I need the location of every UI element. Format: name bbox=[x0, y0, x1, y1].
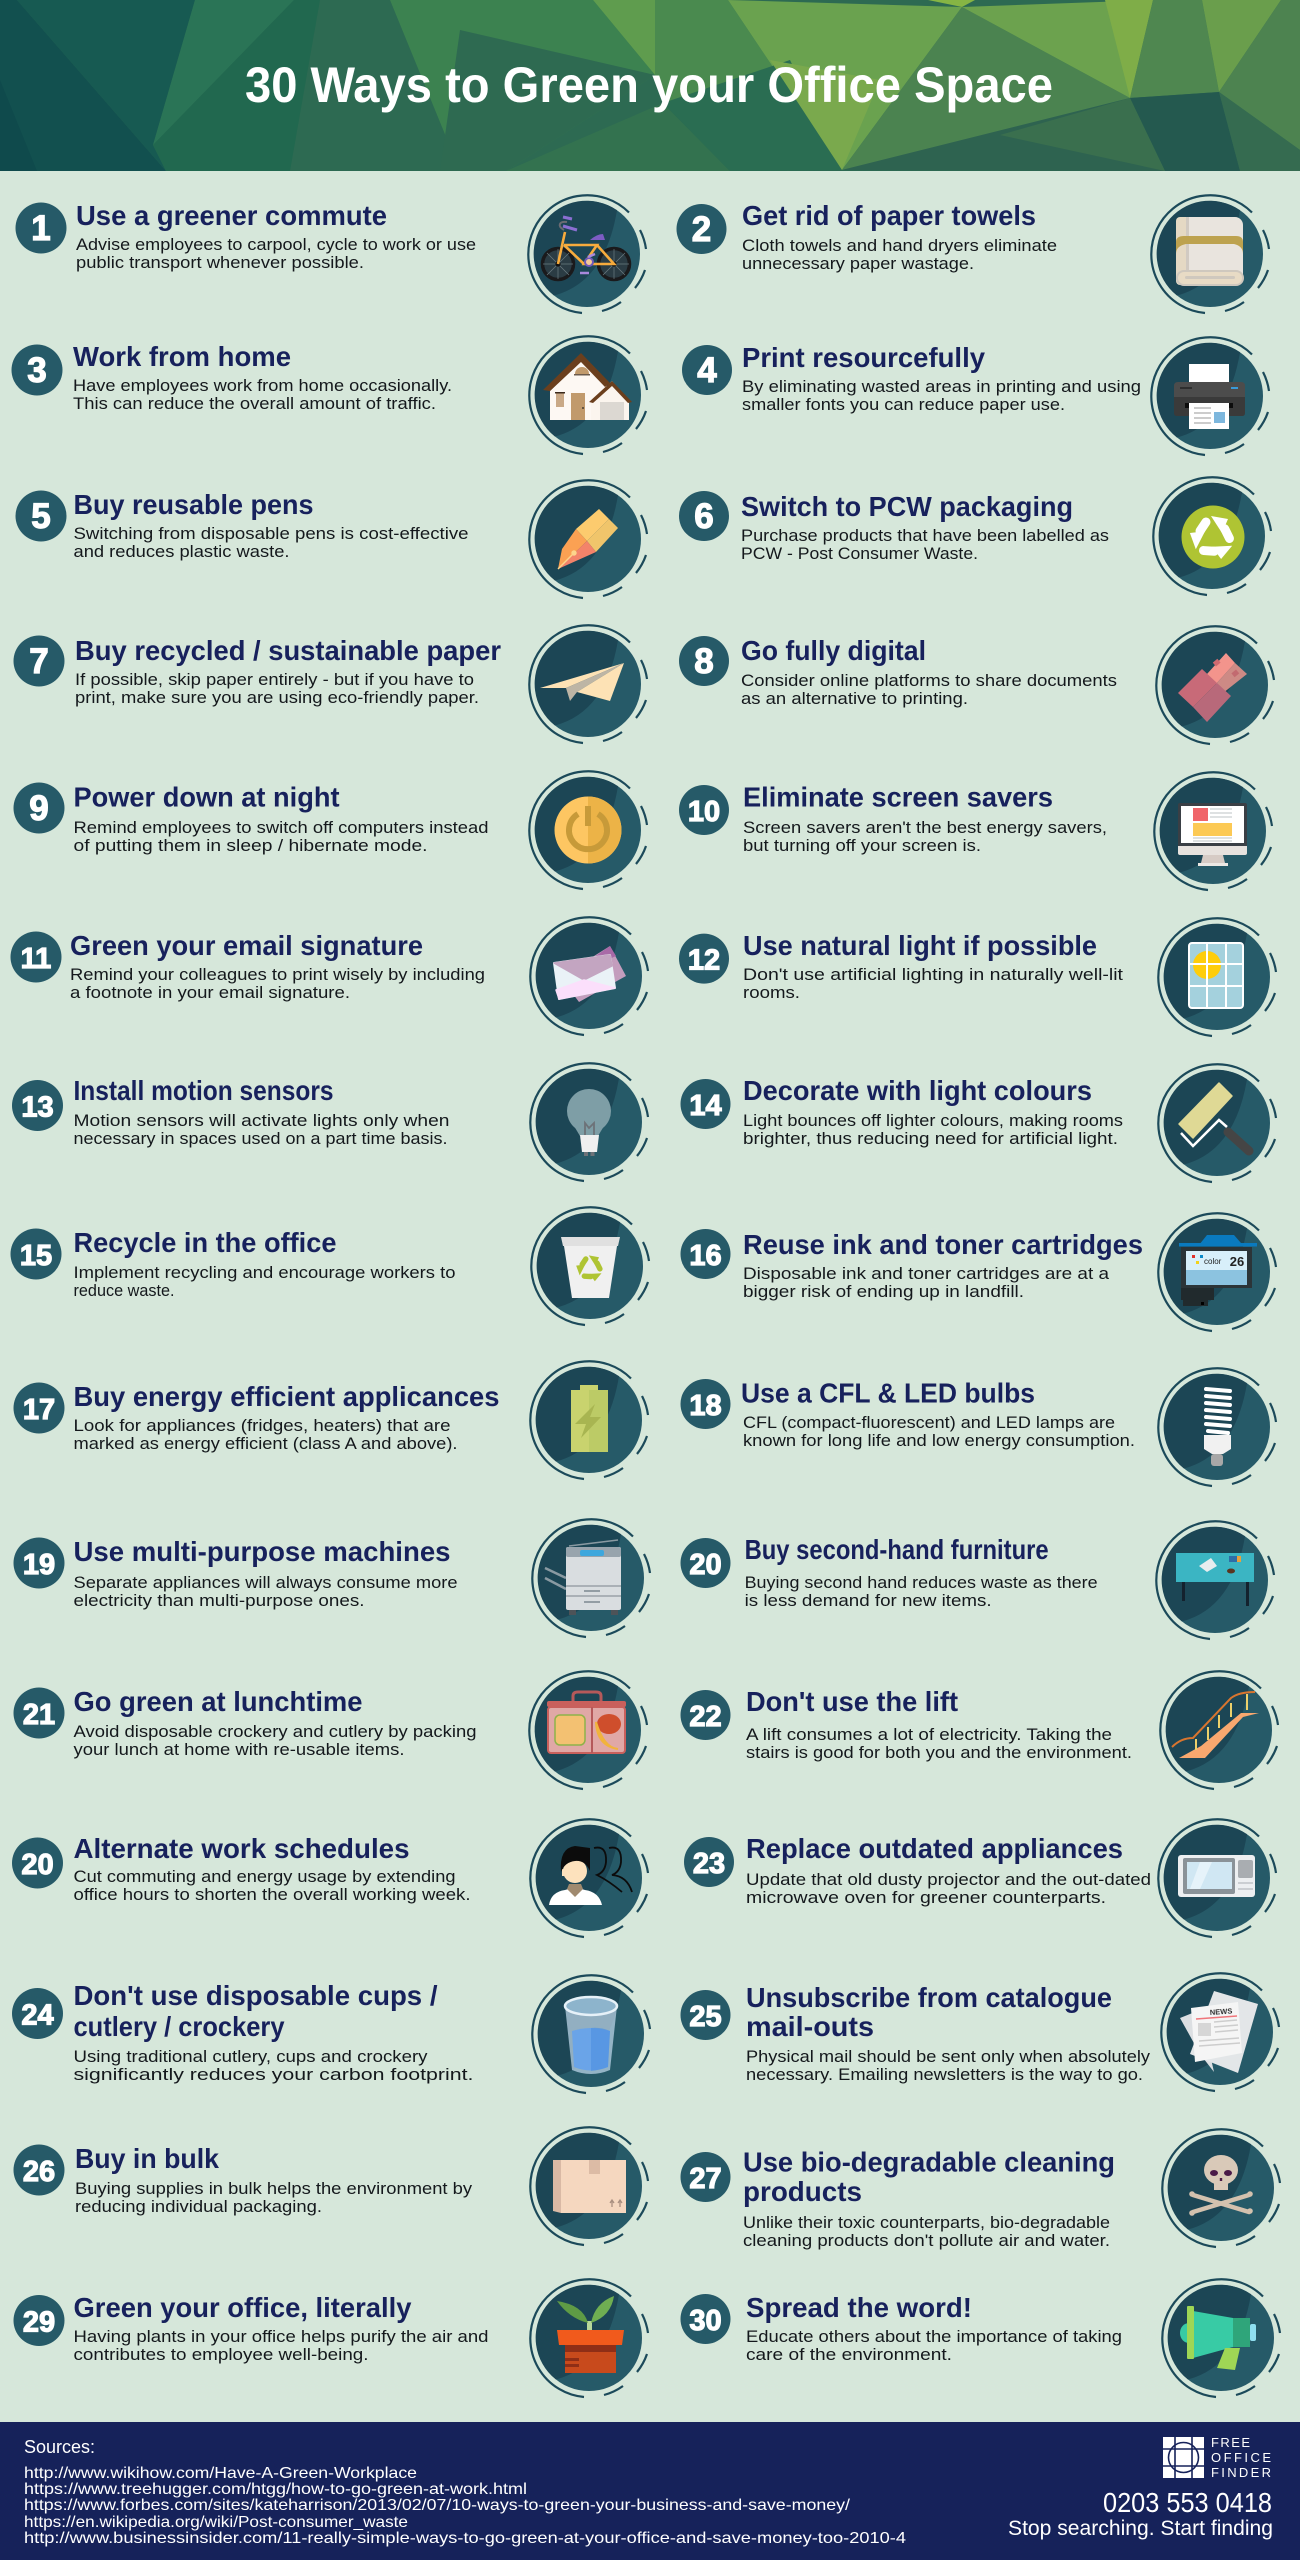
icon: battery bbox=[530, 1361, 648, 1479]
icon: microwave bbox=[1158, 1819, 1276, 1937]
sources list: https://en.wikipedia.org/wiki/Post-consumer_waste bbox=[24, 2514, 408, 2531]
sources list: http://www.wikihow.com/Have-A-Green-Workplace bbox=[24, 2465, 417, 2482]
heading 25: mail-outs bbox=[746, 2011, 874, 2042]
icon: paper plane bbox=[529, 625, 647, 743]
icon: ink cartridge: color bbox=[1204, 1257, 1222, 1266]
description 23: Update that old dusty projector and the out-dated bbox=[746, 1870, 1151, 1889]
description 10: but turning off your screen is. bbox=[743, 836, 981, 855]
heading 2: Get rid of paper towels bbox=[742, 200, 1036, 231]
description 7: print, make sure you are using eco-friendly paper. bbox=[75, 688, 479, 707]
description 21: Avoid disposable crockery and cutlery by packing bbox=[74, 1722, 476, 1741]
description alternate work schedules: office hours to shorten the overall working week. bbox=[74, 1885, 470, 1904]
number badge 27 bbox=[680, 2152, 730, 2202]
description 21: your lunch at home with re-usable items. bbox=[74, 1740, 405, 1759]
description 6: PCW - Post Consumer Waste. bbox=[741, 544, 978, 563]
description 15 bbox=[74, 1263, 455, 1300]
item 5: Buy reusable pens bbox=[16, 480, 647, 598]
icon: cfl bulb bbox=[1158, 1368, 1276, 1486]
icon: paint roller bbox=[1158, 1064, 1276, 1182]
number badge 24: 24 bbox=[21, 2000, 54, 2032]
description 10: Screen savers aren't the best energy savers, bbox=[743, 818, 1107, 837]
description 2: unnecessary paper wastage. bbox=[742, 254, 974, 273]
item 24: Replace outdated appliances bbox=[684, 1819, 1276, 1937]
item 15: Recycle in the office bbox=[10, 1207, 649, 1325]
item 18: Use a CFL & LED bulbs bbox=[680, 1368, 1276, 1486]
number badge 15 bbox=[10, 1228, 62, 1280]
description 13: Motion sensors will activate lights only when bbox=[74, 1111, 450, 1130]
icon: recycle symbol bbox=[1153, 477, 1271, 595]
description 14: Light bounces off lighter colours, making rooms bbox=[743, 1111, 1123, 1130]
description 18: known for long life and low energy consumption. bbox=[743, 1431, 1135, 1450]
number badge 2 bbox=[676, 204, 726, 254]
number badge 19: 19 bbox=[23, 1549, 55, 1581]
item 6: Switch to PCW packaging bbox=[679, 477, 1271, 595]
heading 10: Eliminate screen savers bbox=[743, 782, 1053, 812]
icon: ink cartridge: 26 bbox=[1230, 1254, 1244, 1269]
description 20: Buying second hand reduces waste as there bbox=[745, 1573, 1098, 1592]
sources list: http://www.businessinsider.com/11-really-simple-ways-to-go-green-at-your-office-and-save-money-too-2010-4 bbox=[24, 2530, 906, 2547]
number badge 18: 18 bbox=[689, 1390, 722, 1422]
footer band bbox=[0, 2422, 1300, 2560]
heading 27: Use bio-degradable cleaning bbox=[743, 2147, 1115, 2178]
heading 24: cutlery / crockery bbox=[74, 2011, 285, 2042]
phone number: 0203 553 0418 bbox=[1103, 2487, 1272, 2518]
description 9 bbox=[74, 818, 488, 855]
number badge 13: 13 bbox=[21, 1092, 54, 1124]
number badge 7: 7 bbox=[29, 642, 49, 681]
description 7: If possible, skip paper entirely - but if you have to bbox=[75, 670, 474, 689]
icon: skull and crossbones bbox=[1162, 2129, 1280, 2247]
description 27: cleaning products don't pollute air and water. bbox=[743, 2231, 1110, 2250]
item 28: Use bio-degradable cleaning products bbox=[680, 2129, 1280, 2250]
description 26: Buying supplies in bulk helps the environment by bbox=[75, 2179, 473, 2198]
icon: lunch box bbox=[529, 1671, 647, 1789]
heading 15: Recycle in the office bbox=[74, 1227, 336, 1258]
icon: office workers bbox=[530, 1819, 648, 1937]
item 20: Buy second-hand furniture bbox=[680, 1521, 1274, 1639]
logo wordmark bbox=[1211, 2435, 1271, 2480]
number badge 8: 8 bbox=[694, 642, 714, 681]
heading 24 bbox=[74, 1980, 438, 2042]
number badge 6 bbox=[679, 491, 729, 541]
logo wordmark: OFFICE bbox=[1211, 2450, 1271, 2465]
number badge 17: 17 bbox=[23, 1394, 55, 1426]
item 11: Green your email signature bbox=[10, 917, 648, 1035]
description 4 bbox=[742, 377, 1141, 414]
heading 19: Use multi-purpose machines bbox=[74, 1536, 450, 1567]
icon: printer bbox=[1151, 337, 1269, 455]
item 21: Go green at lunchtime bbox=[14, 1671, 647, 1789]
number badge 22: 22 bbox=[689, 1701, 722, 1733]
number badge 21 bbox=[14, 1688, 64, 1738]
description 17 bbox=[74, 1416, 458, 1453]
heading 8: Go fully digital bbox=[741, 635, 926, 666]
description 14: brighter, thus reducing need for artificial light. bbox=[743, 1129, 1118, 1148]
icon: glass of water bbox=[532, 1975, 650, 2093]
description 25: Physical mail should be sent only when absolutely bbox=[746, 2047, 1151, 2066]
heading 27 bbox=[743, 2147, 1115, 2207]
description 12 bbox=[743, 965, 1123, 1002]
number badge 25 bbox=[680, 1990, 730, 2040]
number badge 1: 1 bbox=[31, 209, 51, 248]
header banner bbox=[0, 0, 1300, 171]
number badge 20 (second): 20 bbox=[21, 1849, 54, 1881]
description 1 bbox=[76, 235, 476, 272]
number badge 26 bbox=[14, 2144, 64, 2196]
number badge 29: 29 bbox=[23, 2306, 55, 2338]
item 27: Buy in bulk bbox=[14, 2127, 648, 2245]
description 11: a footnote in your email signature. bbox=[70, 983, 350, 1002]
item 7: Buy recycled / sustainable paper bbox=[14, 625, 647, 743]
description 13: necessary in spaces used on a part time basis. bbox=[74, 1129, 447, 1148]
description 16 bbox=[743, 1264, 1110, 1301]
item 10: Eliminate screen savers bbox=[679, 772, 1272, 890]
description 9: Remind employees to switch off computers instead bbox=[74, 818, 488, 837]
description 2 bbox=[742, 236, 1057, 273]
number badge 4 bbox=[682, 345, 732, 395]
number badge 20 bbox=[680, 1538, 730, 1588]
description 6: Purchase products that have been labelled as bbox=[741, 526, 1109, 545]
icon: ink cartridge bbox=[1158, 1213, 1276, 1331]
number badge 26: 26 bbox=[23, 2156, 55, 2188]
number badge 21: 21 bbox=[23, 1699, 55, 1731]
description 29 bbox=[74, 2327, 488, 2364]
number badge 12 bbox=[679, 934, 729, 984]
heading 25 bbox=[746, 1982, 1112, 2042]
number badge 7 bbox=[14, 636, 64, 686]
icon: recycling bin bbox=[531, 1207, 649, 1325]
number badge 6: 6 bbox=[694, 497, 714, 536]
item 9: Power down at night bbox=[14, 771, 647, 889]
description 3: This can reduce the overall amount of traffic. bbox=[73, 394, 436, 413]
description 27 bbox=[743, 2213, 1110, 2250]
description 23 bbox=[746, 1870, 1151, 1907]
heading 27: products bbox=[743, 2176, 862, 2207]
number badge 1 bbox=[16, 202, 66, 254]
heading 11: Green your email signature bbox=[70, 930, 423, 961]
number badge 30 bbox=[680, 2294, 730, 2344]
number badge 4: 4 bbox=[697, 351, 717, 390]
icon: usb stick bbox=[1156, 626, 1274, 744]
item 2: Get rid of paper towels bbox=[676, 195, 1269, 313]
description 6 bbox=[741, 526, 1109, 563]
sources list bbox=[24, 2465, 906, 2547]
heading 1: Use a greener commute bbox=[76, 200, 387, 231]
number badge 9 bbox=[14, 782, 64, 834]
heading 5: Buy reusable pens bbox=[74, 489, 314, 520]
icon: bicycle bbox=[528, 195, 646, 313]
icon: light bulb bbox=[530, 1063, 648, 1181]
number badge 16 bbox=[680, 1229, 730, 1279]
icon: newspapers bbox=[1161, 1973, 1279, 2091]
number badge 25: 25 bbox=[689, 2001, 722, 2033]
number badge 14 bbox=[680, 1079, 730, 1129]
description 15: Implement recycling and encourage workers to bbox=[74, 1263, 455, 1282]
icon: pen bbox=[529, 480, 647, 598]
number badge 16: 16 bbox=[689, 1240, 722, 1272]
icon: house bbox=[529, 336, 647, 454]
number badge 10 bbox=[679, 785, 729, 835]
number badge 11 bbox=[10, 932, 62, 982]
description 7 bbox=[75, 670, 479, 707]
description 2: Cloth towels and hand dryers eliminate bbox=[742, 236, 1057, 255]
item 29: Green your office, literally bbox=[14, 2279, 648, 2397]
item 26: Unsubscribe from catalogue mail-outs bbox=[680, 1973, 1279, 2091]
item 4: Print resourcefully bbox=[682, 337, 1269, 455]
item 16: Reuse ink and toner cartridges bbox=[680, 1213, 1276, 1331]
item 25: Don't use disposable cups / cutlery / crockery bbox=[12, 1975, 650, 2093]
number badge 23 bbox=[684, 1837, 734, 1887]
description 26 bbox=[75, 2179, 473, 2216]
description 21 bbox=[74, 1722, 476, 1759]
item 19: Use multi-purpose machines bbox=[14, 1519, 650, 1637]
heading 25: Unsubscribe from catalogue bbox=[746, 1982, 1112, 2013]
description 9: of putting them in sleep / hibernate mode. bbox=[74, 836, 428, 855]
description 11 bbox=[70, 965, 485, 1002]
description 1: Advise employees to carpool, cycle to work or use bbox=[76, 235, 476, 254]
description 25: necessary. Emailing newsletters is the way to go. bbox=[746, 2065, 1143, 2084]
description 4: smaller fonts you can reduce paper use. bbox=[742, 395, 1065, 414]
icon: cardboard box bbox=[530, 2127, 648, 2245]
heading alternate work schedules: Alternate work schedules bbox=[74, 1833, 410, 1864]
heading 22: Don't use the lift bbox=[746, 1686, 958, 1717]
heading 9: Power down at night bbox=[74, 782, 340, 812]
description alternate work schedules: Cut commuting and energy usage by extending bbox=[74, 1867, 456, 1886]
number badge 20 (second) bbox=[12, 1838, 63, 1888]
number badge 9: 9 bbox=[29, 789, 49, 828]
description 19: electricity than multi-purpose ones. bbox=[74, 1591, 364, 1610]
description 22: stairs is good for both you and the environment. bbox=[746, 1743, 1132, 1762]
description 3: Have employees work from home occasionally. bbox=[73, 376, 452, 395]
description 19 bbox=[74, 1573, 458, 1610]
description 22: A lift consumes a lot of electricity. Taking the bbox=[746, 1725, 1112, 1744]
description 16: Disposable ink and toner cartridges are at a bbox=[743, 1264, 1110, 1283]
heading 3: Work from home bbox=[73, 341, 291, 372]
number badge 3: 3 bbox=[27, 351, 47, 390]
icon: potted plant bbox=[530, 2279, 648, 2397]
description 29: contributes to employee well-being. bbox=[74, 2345, 368, 2364]
description 30: care of the environment. bbox=[746, 2345, 952, 2364]
description 5: and reduces plastic waste. bbox=[74, 542, 290, 561]
description 30: Educate others about the importance of taking bbox=[746, 2327, 1122, 2346]
description 3 bbox=[73, 376, 452, 413]
heading 4: Print resourcefully bbox=[742, 342, 985, 373]
heading 12: Use natural light if possible bbox=[743, 930, 1097, 961]
item 14: Decorate with light colours bbox=[680, 1064, 1276, 1182]
logo mark bbox=[1163, 2437, 1204, 2478]
description 10 bbox=[743, 818, 1107, 855]
number badge 13 bbox=[12, 1080, 63, 1131]
item 1: Use a greener commute bbox=[16, 195, 646, 313]
number badge 10: 10 bbox=[688, 796, 720, 828]
heading 6: Switch to PCW packaging bbox=[741, 491, 1073, 522]
description 12: rooms. bbox=[743, 983, 800, 1002]
description 24 bbox=[74, 2047, 474, 2084]
number badge 8 bbox=[679, 636, 729, 686]
number badge 24 bbox=[12, 1988, 63, 2039]
description 14 bbox=[743, 1111, 1123, 1148]
heading 7: Buy recycled / sustainable paper bbox=[75, 635, 501, 666]
description 17: marked as energy efficient (class A and above). bbox=[74, 1434, 458, 1453]
number badge 5: 5 bbox=[31, 497, 51, 536]
item 12: Use natural light if possible bbox=[679, 918, 1276, 1036]
number badge 12: 12 bbox=[688, 945, 720, 977]
heading 20: Buy second-hand furniture bbox=[745, 1534, 1049, 1565]
description 22 bbox=[746, 1725, 1132, 1762]
heading 23: Replace outdated appliances bbox=[746, 1833, 1123, 1864]
description 12: Don't use artificial lighting in naturally well-lit bbox=[743, 965, 1123, 984]
sources list: https://www.treehugger.com/htgg/how-to-go-green-at-work.html bbox=[24, 2481, 527, 2498]
number badge 18 bbox=[680, 1379, 730, 1429]
item 13: Install motion sensors bbox=[12, 1063, 648, 1181]
heading 24: Don't use disposable cups / bbox=[74, 1980, 438, 2011]
description 26: reducing individual packaging. bbox=[75, 2197, 322, 2216]
description 24: significantly reduces your carbon footprint. bbox=[74, 2065, 474, 2084]
heading 18: Use a CFL & LED bulbs bbox=[741, 1378, 1035, 1408]
number badge 5 bbox=[16, 490, 66, 542]
icon: copier machine bbox=[532, 1519, 650, 1637]
item 22: Don't use the lift bbox=[680, 1671, 1278, 1789]
description 16: bigger risk of ending up in landfill. bbox=[743, 1282, 1024, 1301]
number badge 30: 30 bbox=[689, 2305, 722, 2337]
description 1: public transport whenever possible. bbox=[76, 253, 364, 272]
heading 26: Buy in bulk bbox=[75, 2143, 219, 2174]
icon: desk bbox=[1156, 1521, 1274, 1639]
description 18: CFL (compact-fluorescent) and LED lamps are bbox=[743, 1413, 1115, 1432]
icon: escalator bbox=[1160, 1671, 1278, 1789]
description 23: microwave oven for greener counterparts. bbox=[746, 1888, 1106, 1907]
icon: computer monitor bbox=[1154, 772, 1272, 890]
number badge 22 bbox=[680, 1690, 730, 1740]
description 17: Look for appliances (fridges, heaters) that are bbox=[74, 1416, 450, 1435]
description 18 bbox=[743, 1413, 1135, 1450]
heading 29: Green your office, literally bbox=[74, 2292, 412, 2323]
icon: window with sun bbox=[1158, 918, 1276, 1036]
description 27: Unlike their toxic counterparts, bio-degradable bbox=[743, 2213, 1110, 2232]
description 8 bbox=[741, 671, 1117, 708]
number badge 20: 20 bbox=[689, 1549, 722, 1581]
description 5: Switching from disposable pens is cost-effective bbox=[74, 524, 468, 543]
icon: power button bbox=[529, 771, 647, 889]
description alternate work schedules bbox=[74, 1867, 470, 1904]
description 30 bbox=[746, 2327, 1122, 2364]
description 8: as an alternative to printing. bbox=[741, 689, 968, 708]
description 20 bbox=[745, 1573, 1098, 1610]
description 29: Having plants in your office helps purify the air and bbox=[74, 2327, 488, 2346]
heading 30: Spread the word! bbox=[746, 2292, 972, 2323]
heading 14: Decorate with light colours bbox=[743, 1075, 1092, 1106]
sources heading: Sources: bbox=[24, 2437, 95, 2457]
description 11: Remind your colleagues to print wisely by including bbox=[70, 965, 485, 984]
description 25 bbox=[746, 2047, 1151, 2084]
logo wordmark: FINDER bbox=[1211, 2465, 1271, 2480]
number badge 19 bbox=[14, 1538, 64, 1588]
number badge 23: 23 bbox=[693, 1848, 725, 1880]
number badge 14: 14 bbox=[689, 1090, 722, 1122]
icon: envelopes bbox=[530, 917, 648, 1035]
description 24: Using traditional cutlery, cups and crockery bbox=[74, 2047, 428, 2066]
item 3: Work from home bbox=[12, 336, 647, 454]
number badge 3 bbox=[12, 344, 62, 396]
heading 16: Reuse ink and toner cartridges bbox=[743, 1229, 1143, 1260]
sources list: https://www.forbes.com/sites/kateharrison/2013/02/07/10-ways-to-green-your-business-and-save-money/ bbox=[24, 2497, 851, 2514]
description 8: Consider online platforms to share documents bbox=[741, 671, 1117, 690]
description 20: is less demand for new items. bbox=[745, 1591, 992, 1610]
heading 21: Go green at lunchtime bbox=[74, 1686, 362, 1717]
item 23: Alternate work schedules bbox=[12, 1819, 648, 1937]
description 4: By eliminating wasted areas in printing and using bbox=[742, 377, 1141, 396]
tagline: Stop searching. Start finding bbox=[1008, 2517, 1273, 2540]
number badge 27: 27 bbox=[689, 2163, 722, 2195]
heading 13: Install motion sensors bbox=[74, 1075, 334, 1106]
logo wordmark: FREE bbox=[1211, 2435, 1250, 2450]
number badge 2: 2 bbox=[692, 210, 711, 249]
icon: towels bbox=[1151, 195, 1269, 313]
description 19: Separate appliances will always consume more bbox=[74, 1573, 458, 1592]
icon: newspapers: NEWS bbox=[1210, 2006, 1233, 2017]
description 5 bbox=[74, 524, 468, 561]
number badge 15: 15 bbox=[20, 1240, 52, 1272]
item 8: Go fully digital bbox=[679, 626, 1274, 744]
heading 17: Buy energy efficient applicances bbox=[74, 1381, 500, 1412]
item 30: Spread the word! bbox=[680, 2279, 1280, 2397]
description 13 bbox=[74, 1111, 450, 1148]
item 17: Buy energy efficient applicances bbox=[14, 1361, 648, 1479]
number badge 11: 11 bbox=[21, 943, 51, 975]
number badge 29 bbox=[14, 2295, 64, 2346]
number badge 17 bbox=[14, 1382, 64, 1434]
icon: megaphone bbox=[1162, 2279, 1280, 2397]
title: 30 Ways to Green your Office Space bbox=[245, 57, 1053, 113]
description 15: reduce waste. bbox=[74, 1281, 174, 1300]
